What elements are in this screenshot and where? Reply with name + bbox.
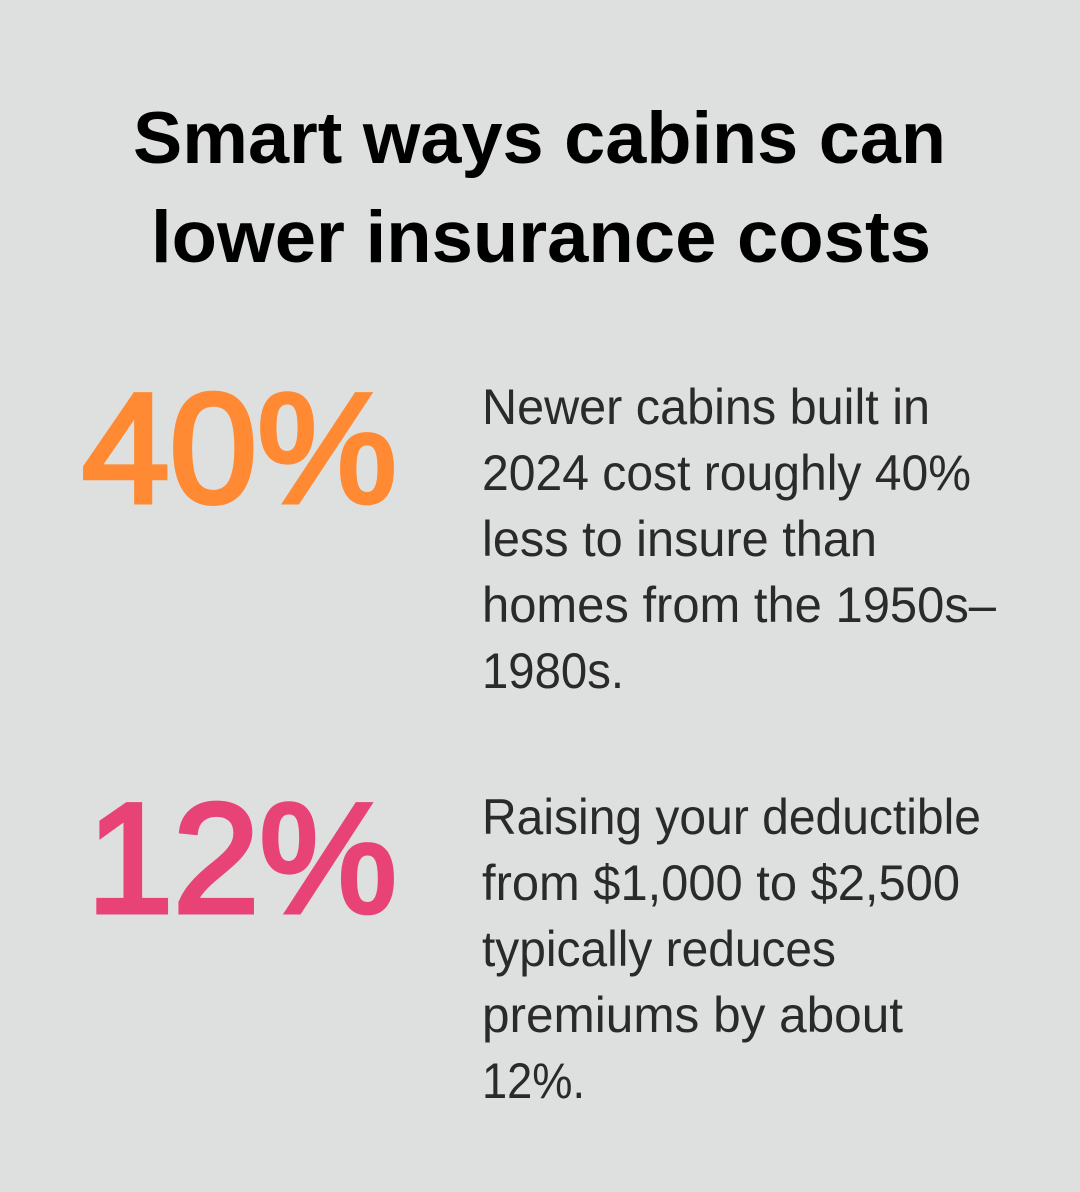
- title: [133, 98, 946, 278]
- text block: deductible: 12%.: [482, 1053, 585, 1109]
- panel: 12% statistic: [87, 772, 981, 1109]
- text block: deductible: typically reduces: [482, 921, 836, 977]
- text block: newer cabins: 2024 cost roughly 40%: [482, 445, 971, 501]
- title: lower insurance costs: [151, 197, 931, 278]
- text block: newer cabins: homes from the 1950s–: [482, 577, 996, 633]
- text block: newer cabins: [482, 379, 996, 699]
- text block: deductible: Raising your deductible: [482, 789, 981, 845]
- stat number: 12%: 12%: [87, 772, 397, 946]
- text block: deductible: [482, 789, 981, 1109]
- text block: newer cabins: 1980s.: [482, 643, 624, 699]
- text block: deductible: premiums by about: [482, 987, 903, 1043]
- text block: newer cabins: Newer cabins built in: [482, 379, 930, 435]
- text block: newer cabins: less to insure than: [482, 511, 877, 567]
- stat number: 40%: 40%: [82, 362, 397, 536]
- panel: 40% statistic: [82, 362, 996, 699]
- text block: deductible: from $1,000 to $2,500: [482, 855, 960, 911]
- title: Smart ways cabins can: [133, 98, 946, 179]
